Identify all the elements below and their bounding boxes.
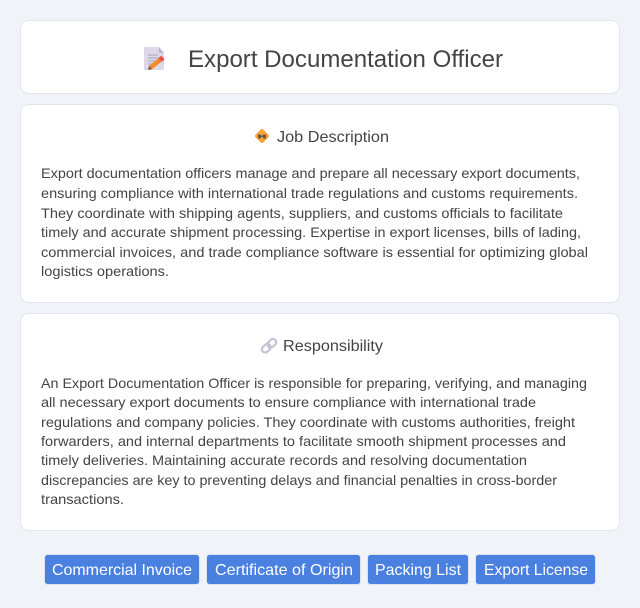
tag: certificate of origin <box>206 554 360 584</box>
tag: packing list <box>368 554 468 584</box>
text block: job description: Export documentation officers manage and prepare all necessary export documents, <box>41 165 580 181</box>
icon: chain link <box>261 338 277 354</box>
text block: job description: logistics operations. <box>41 263 169 279</box>
icon: document with pencil <box>144 47 164 70</box>
text block: responsibility: regulations and company policies. They coordinate with customs authorities, freight <box>41 414 575 430</box>
tag: commercial invoice: Commercial Invoice <box>52 562 192 579</box>
tag: packing list: Packing List <box>375 562 462 579</box>
text block: responsibility: transactions. <box>41 491 124 507</box>
title text: Export Documentation Officer <box>188 46 503 73</box>
text block: job description: They coordinate with shipping agents, suppliers, and customs officials to facilitate <box>41 205 563 221</box>
tag: certificate of origin: Certificate of Origin <box>215 562 353 579</box>
text block: job description <box>41 165 588 279</box>
tag: export license <box>476 554 596 584</box>
panel: title <box>20 20 620 94</box>
text block: job description: timely and accurate shipment processing. Expertise in export licenses, bills of lading, <box>41 224 581 240</box>
tag: commercial invoice <box>44 554 200 584</box>
text block: responsibility: timely deliveries. Maintaining accurate records and resolving documentation <box>41 452 527 468</box>
text block: responsibility: discrepancies are key to preventing delays and financial penalties in cross-border <box>41 472 557 488</box>
heading: job description: Job Description <box>277 129 389 146</box>
text block: job description: commercial invoices, and trade compliance software is essential for optimizing global <box>41 244 588 260</box>
text block: job description: ensuring compliance with international trade regulations and customs requirements. <box>41 185 578 201</box>
text block: responsibility: all necessary export documents to ensure compliance with international trade <box>41 394 536 410</box>
panel: job description <box>20 104 620 302</box>
icon: orange diamond <box>254 128 270 144</box>
text block: responsibility: An Export Documentation Officer is responsible for preparing, verifying, and managing <box>41 375 587 391</box>
heading: responsibility: Responsibility <box>283 338 383 355</box>
text block: responsibility <box>41 375 587 507</box>
tag: export license: Export License <box>484 562 588 579</box>
panel: responsibility <box>20 314 620 530</box>
text block: responsibility: forwarders, and internal departments to facilitate smooth shipment processes and <box>41 433 566 449</box>
